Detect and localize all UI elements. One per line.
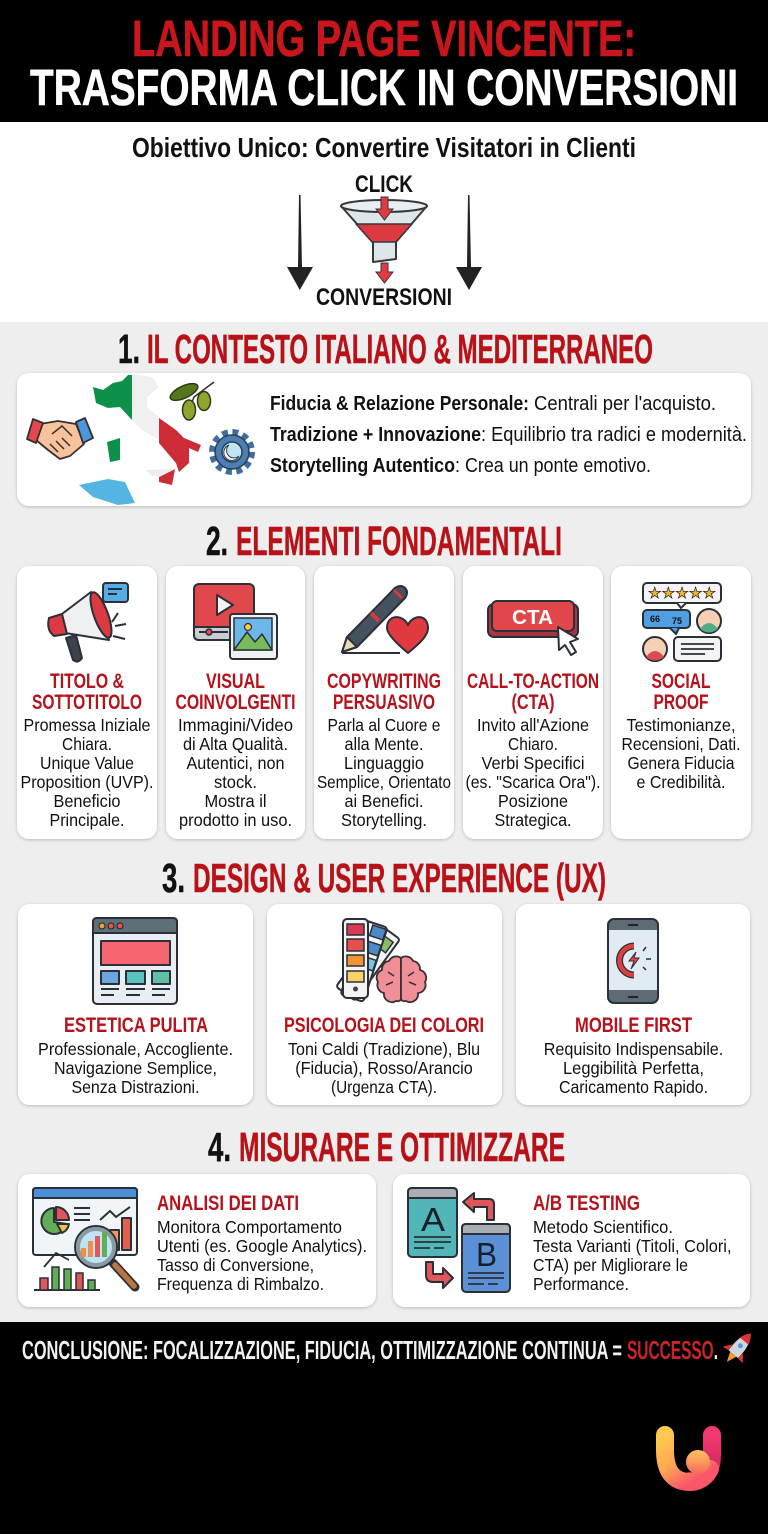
card text: (es. "Scarica Ora"). [466, 772, 600, 792]
card text: Toni Caldi (Tradizione), Blu [288, 1039, 480, 1059]
icon: CTA button [488, 601, 578, 655]
text: storytelling: : Crea un ponte emotivo. [455, 454, 651, 477]
panel: copywriting persuasivo [314, 566, 454, 839]
card text: Strategica. [494, 810, 572, 830]
icon: reviews: ★★★★★ [648, 584, 716, 602]
card text: Immagini/Video [178, 715, 293, 735]
card text: (Fiducia), Rosso/Arancio [295, 1058, 473, 1078]
panel: mobile first [516, 904, 750, 1105]
icon: megaphone [48, 583, 128, 662]
page background [0, 322, 768, 1322]
card text: Navigazione Semplice, [54, 1058, 217, 1078]
footer band [0, 1322, 768, 1534]
icon: A/B windows: A [421, 1201, 445, 1238]
card title: ESTETICA PULITA [64, 1014, 208, 1037]
card text: Chiaro. [508, 734, 558, 754]
text: fiducia: Fiducia & Relazione Personale: [270, 392, 529, 415]
section heading 3 [162, 855, 606, 901]
panel: social proof [611, 566, 751, 839]
card text [20, 715, 154, 830]
card text: Verbi Specifici [482, 753, 584, 773]
card title: CALL-TO-ACTION [467, 670, 599, 693]
panel: call to action [463, 566, 603, 839]
card text: Beneficio [54, 791, 120, 811]
card title: ANALISI DEI DATI [157, 1191, 299, 1215]
card text: prodotto in uso. [179, 810, 292, 830]
panel: contesto italiano [17, 373, 751, 506]
panel: visual coinvolgenti [166, 566, 305, 839]
card text: Semplice, Orientato [317, 772, 451, 792]
icon: video and picture [194, 584, 277, 659]
card text: di Alta Qualità. [183, 734, 288, 754]
card text: Metodo Scientifico. [533, 1217, 673, 1237]
text: tradizione: Tradizione + Innovazione [270, 423, 481, 446]
icon: gear [212, 432, 252, 472]
card text: Performance. [533, 1274, 629, 1294]
icon: reviews [643, 583, 721, 661]
arrow: right down [456, 195, 482, 290]
icon: browser layout [93, 918, 177, 1004]
icon: CTA button: CTA [512, 607, 553, 629]
card title [32, 670, 142, 714]
card text: Recensioni, Dati. [622, 734, 740, 754]
icon: analytics dashboard [33, 1188, 137, 1290]
card text: CTA) per Migliorare le [533, 1255, 688, 1275]
icon: olive branch [168, 380, 214, 420]
icon: A/B windows: B [476, 1236, 497, 1273]
card text: Storytelling. [341, 810, 427, 830]
card text: Testimonianze, [626, 715, 736, 735]
text: fiducia [270, 392, 716, 415]
card text: Posizione [498, 791, 568, 811]
card title: VISUAL [206, 670, 265, 693]
panel: estetica pulita [18, 904, 253, 1105]
card text: Senza Distrazioni. [72, 1077, 200, 1097]
card text [533, 1217, 732, 1294]
card text: Requisito Indispensabile. [544, 1039, 723, 1059]
card text [544, 1039, 723, 1097]
card text: Mostra il [204, 791, 266, 811]
card title: PROOF [654, 691, 709, 714]
text: fiducia: Centrali per l'acquisto. [534, 392, 716, 415]
arrow: left down [287, 195, 313, 290]
card text: Leggibilità Perfetta, [563, 1058, 704, 1078]
text: storytelling: Storytelling Autentico [270, 454, 455, 477]
text: tradizione [270, 423, 747, 446]
card title: A/B TESTING [533, 1191, 640, 1215]
panel: titolo e sottotitolo [17, 566, 157, 839]
card text [178, 715, 293, 830]
card text: Promessa Iniziale [24, 715, 150, 735]
card text: Caricamento Rapido. [559, 1077, 708, 1097]
card text: (Urgenza CTA). [331, 1077, 437, 1097]
card title: COINVOLGENTI [176, 691, 296, 714]
panel: A/B testing [393, 1174, 750, 1307]
click label: CLICK [355, 171, 414, 198]
card text: Tasso di Conversione, [157, 1255, 314, 1275]
icon: pen and heart [342, 586, 428, 653]
card text: Principale. [50, 810, 124, 830]
card title [176, 670, 296, 714]
card text: Genera Fiducia [628, 753, 735, 773]
panel: psicologia dei colori [267, 904, 502, 1105]
section heading 2 [206, 518, 562, 564]
header band [0, 0, 768, 122]
card text [317, 715, 451, 830]
card title: TITOLO & [50, 670, 124, 693]
card title [327, 670, 441, 714]
card text: ai Benefici. [344, 791, 424, 811]
card text: alla Mente. [344, 734, 424, 754]
card text [38, 1039, 233, 1097]
section heading 4 [208, 1124, 565, 1170]
card title: PERSUASIVO [333, 691, 435, 714]
icon: A/B windows [408, 1188, 510, 1292]
card title: MOBILE FIRST [575, 1014, 692, 1037]
icon: handshake [27, 418, 93, 459]
card text [622, 715, 740, 792]
text: storytelling [270, 454, 651, 477]
icon: smartphone [608, 919, 658, 1003]
section heading 3: 3. [162, 855, 185, 901]
panel: objective funnel [0, 122, 768, 322]
icon: reviews: 66 [650, 614, 660, 624]
icon: rocket [717, 1325, 761, 1370]
card title: SOCIAL [652, 670, 711, 693]
card text: Proposition (UVP). [20, 772, 154, 792]
card text: Chiara. [62, 734, 112, 754]
card text [288, 1039, 480, 1097]
icon: swatches and brain [336, 919, 426, 1002]
card text: Utenti (es. Google Analytics). [157, 1236, 367, 1256]
card title: (CTA) [512, 691, 554, 714]
conversions label: CONVERSIONI [316, 284, 452, 311]
card text: Invito all'Azione [477, 715, 589, 735]
card text: Frequenza di Rimbalzo. [157, 1274, 324, 1294]
icon: map of Italy [79, 374, 201, 505]
section heading 2: 2. [206, 518, 228, 564]
card text: Autentici, non [186, 753, 284, 773]
card text: Professionale, Accogliente. [38, 1039, 233, 1059]
card text [466, 715, 600, 830]
icon: funnel [341, 197, 427, 283]
card text: Monitora Comportamento [157, 1217, 342, 1237]
card title [652, 670, 711, 714]
objective heading: Obiettivo Unico: Convertire Visitatori in Clienti [132, 132, 636, 163]
card title: SOTTOTITOLO [32, 691, 142, 714]
card text: e Credibilità. [636, 772, 726, 792]
card text: Unique Value [40, 753, 134, 773]
icon: reviews: 75 [672, 616, 682, 626]
section heading 2: ELEMENTI FONDAMENTALI [236, 518, 562, 564]
card title [467, 670, 599, 714]
logo [665, 1435, 712, 1482]
card text: Linguaggio [344, 753, 424, 773]
section heading 4: 4. [208, 1124, 231, 1170]
section heading 4: MISURARE E OTTIMIZZARE [239, 1124, 565, 1170]
panel: analisi dei dati [18, 1174, 376, 1307]
card text: stock. [214, 772, 257, 792]
card title: PSICOLOGIA DEI COLORI [284, 1014, 484, 1037]
card text [157, 1217, 367, 1294]
card text: Parla al Cuore e [328, 715, 440, 735]
section heading 1: 1. [118, 326, 140, 372]
card text: Testa Varianti (Titoli, Colori, [533, 1236, 732, 1256]
card title: COPYWRITING [327, 670, 441, 693]
